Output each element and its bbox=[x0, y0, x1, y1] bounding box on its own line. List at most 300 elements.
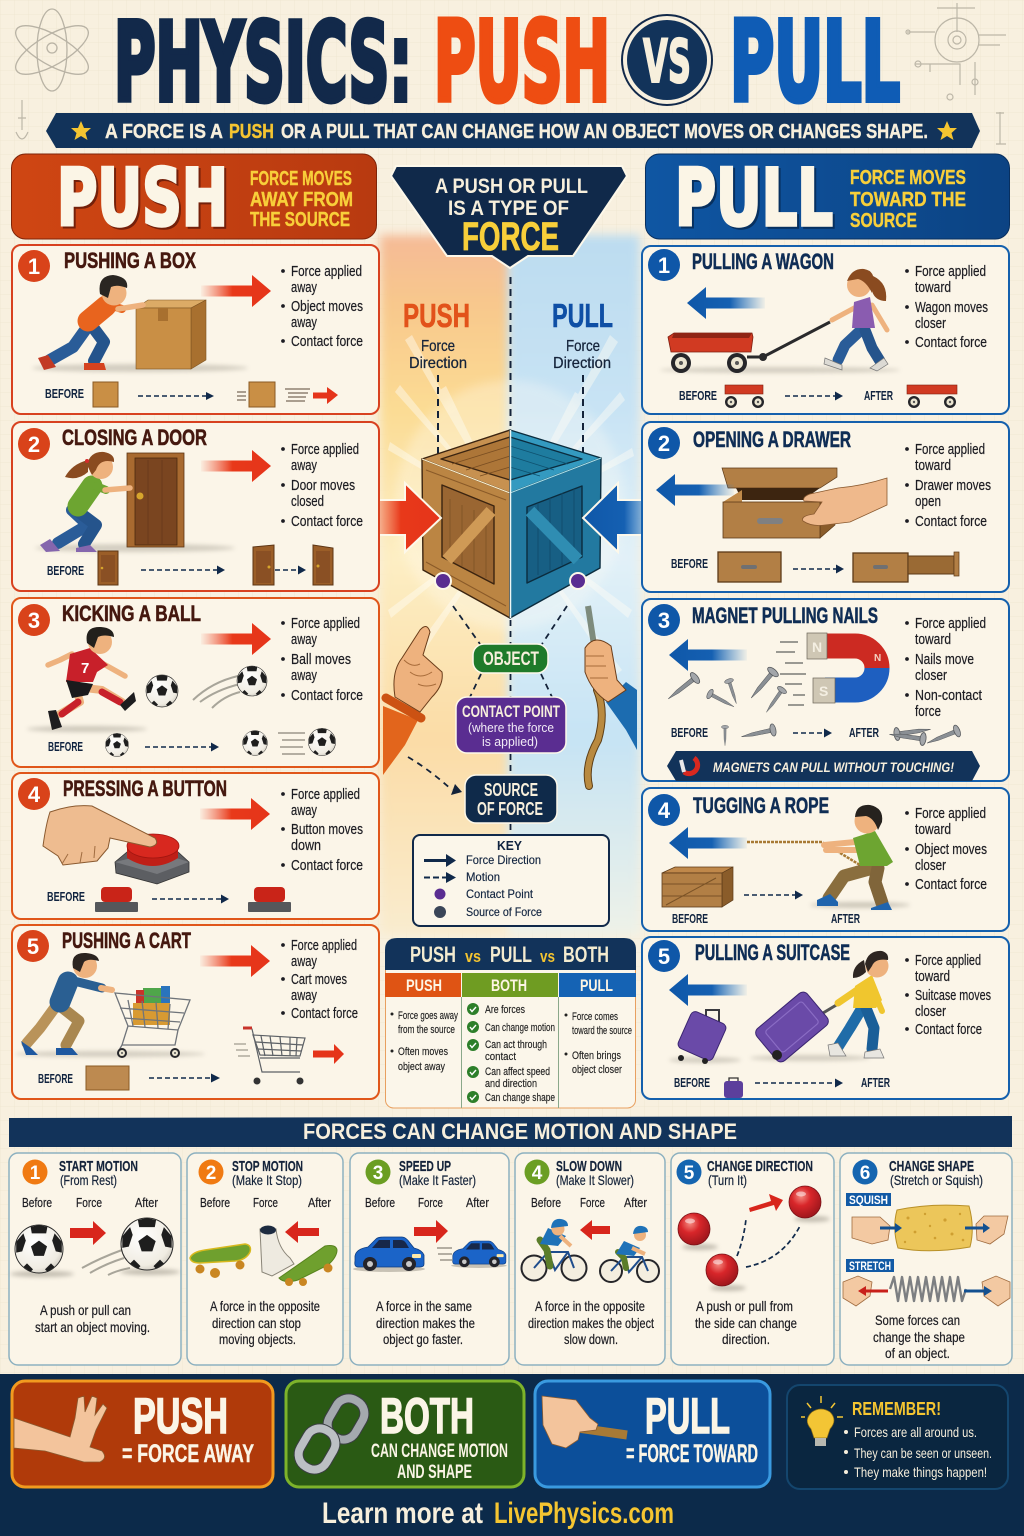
caption: direction makes the bbox=[376, 1315, 475, 1331]
sub-heading: away from source bbox=[250, 168, 353, 231]
before and after strip bbox=[674, 1075, 890, 1098]
bullets: Contact force bbox=[915, 334, 987, 351]
bullets: away bbox=[291, 314, 317, 331]
panel: stop motion bbox=[187, 1153, 343, 1365]
bullets: away bbox=[291, 953, 317, 970]
bullets bbox=[905, 615, 986, 720]
reminder list: Forces are all around us. bbox=[854, 1424, 977, 1440]
labels: before force after: Before bbox=[365, 1195, 395, 1210]
bullets: away bbox=[291, 987, 317, 1004]
heading: PULL: PULL bbox=[675, 154, 833, 244]
bullets: force bbox=[915, 703, 941, 720]
column: PULL: toward the source bbox=[572, 1025, 632, 1037]
arrow: force bbox=[580, 1220, 610, 1240]
badge 4: 4 bbox=[532, 1163, 543, 1184]
heading: (From Rest) bbox=[60, 1172, 117, 1188]
illustration: wagon bbox=[660, 322, 900, 373]
arrow: pull into crate bbox=[583, 483, 658, 552]
caption: force away: = FORCE AWAY bbox=[122, 1440, 254, 1468]
bullets: closer bbox=[915, 1003, 946, 1020]
sub-heading: toward source: FORCE MOVES bbox=[850, 167, 966, 189]
caption: A force in the opposite bbox=[535, 1298, 645, 1314]
footer band bbox=[0, 1374, 1024, 1536]
bullets: Contact force bbox=[915, 1021, 982, 1038]
badge 2 bbox=[648, 427, 680, 459]
word: PUSH: PUSH bbox=[133, 1388, 228, 1444]
bullets: Force applied bbox=[915, 805, 986, 822]
key: contact point: Contact Point bbox=[466, 887, 534, 901]
arrow: force bbox=[285, 1221, 319, 1243]
heading: (Turn It) bbox=[708, 1172, 747, 1188]
bullets: down bbox=[291, 837, 321, 854]
labels: before force after bbox=[22, 1195, 159, 1210]
heading: (Make It Stop) bbox=[232, 1172, 302, 1188]
bullets: closed bbox=[291, 493, 324, 510]
crate teal side bbox=[510, 430, 601, 618]
caption: of an object. bbox=[885, 1345, 950, 1361]
heading: PUSHING A CART bbox=[62, 928, 191, 953]
panel: change direction bbox=[671, 1153, 834, 1365]
illustration: girl closing door bbox=[35, 452, 235, 552]
column: BOTH: Can change motion bbox=[485, 1022, 555, 1034]
column: PUSH: object away bbox=[398, 1061, 445, 1073]
heading bbox=[707, 1158, 813, 1188]
illustration: kid kicking ball: 7 bbox=[81, 660, 89, 677]
caption: A force in the opposite bbox=[210, 1298, 320, 1314]
reminder list: They make things happen! bbox=[854, 1464, 987, 1480]
word: PULL: PULL bbox=[645, 1388, 730, 1444]
panel: speed up bbox=[350, 1153, 509, 1365]
legend: key bbox=[413, 835, 609, 926]
illustration: pressing hand bbox=[43, 806, 157, 865]
arrow: side force bbox=[749, 1194, 783, 1212]
label: CONTACT POINT: is applied) bbox=[482, 734, 538, 749]
label: push force direction: Force bbox=[421, 338, 455, 355]
label: SOURCE OF FORCE: SOURCE bbox=[484, 780, 538, 800]
illustration: squished sponge with hands bbox=[852, 1205, 1008, 1251]
heading: STOP MOTION bbox=[232, 1158, 303, 1175]
panel: change shape bbox=[840, 1153, 1012, 1365]
arrow: force bbox=[70, 1221, 106, 1245]
bullets bbox=[905, 441, 991, 530]
illustration: kid pushing box bbox=[32, 275, 248, 372]
bullets: Force applied bbox=[915, 952, 981, 969]
column: BOTH: Can change shape bbox=[485, 1092, 555, 1104]
bullets: Contact force bbox=[915, 513, 987, 530]
heading: PULLING A SUITCASE bbox=[695, 940, 850, 965]
before and after strip bbox=[47, 545, 333, 585]
arrow: force bbox=[200, 798, 270, 830]
column: PUSH: Often moves bbox=[398, 1046, 448, 1058]
before and after strip bbox=[38, 1028, 344, 1090]
label: OBJECT bbox=[473, 644, 548, 673]
badge 2: 2 bbox=[28, 432, 40, 457]
caption: moving objects. bbox=[219, 1331, 296, 1347]
table title: PUSH bbox=[410, 942, 456, 967]
bullets: Contact force bbox=[291, 333, 363, 350]
caption: direction makes the object bbox=[528, 1315, 654, 1331]
key: force direction: Force Direction bbox=[466, 853, 541, 867]
column: PULL bbox=[559, 973, 636, 1076]
panel: pull summary bbox=[535, 1381, 770, 1487]
illustration: girl pulling wagon bbox=[824, 269, 888, 371]
badge 5 bbox=[648, 940, 680, 972]
before and after strip bbox=[671, 723, 962, 749]
caption bbox=[528, 1298, 654, 1347]
bullets: Force applied bbox=[291, 786, 360, 803]
badge 1: 1 bbox=[30, 1163, 41, 1184]
heading: SLOW DOWN bbox=[556, 1158, 622, 1175]
bullets: Contact force bbox=[291, 513, 363, 530]
badge 2 bbox=[18, 428, 50, 460]
table title bbox=[385, 938, 636, 970]
bullets: Object moves bbox=[915, 841, 987, 858]
labels: before force after: After bbox=[135, 1195, 159, 1210]
section banner: forces can change motion and shape bbox=[9, 1116, 1012, 1147]
heading: PUSHING A BOX bbox=[64, 248, 196, 273]
sub-heading: toward source: TOWARD THE bbox=[850, 189, 966, 211]
illustration: suitcase at rest bbox=[669, 1010, 741, 1064]
illustration: car after bbox=[437, 1241, 507, 1268]
panel: slow down bbox=[515, 1153, 665, 1365]
column: BOTH: Can act through bbox=[485, 1039, 547, 1051]
column: BOTH: and direction bbox=[485, 1078, 537, 1090]
callout: a type of force bbox=[391, 166, 627, 268]
arrow: force bbox=[669, 974, 747, 1006]
column: PULL: PULL bbox=[580, 976, 613, 995]
table title: PULL bbox=[490, 942, 532, 967]
icon: light bulb bbox=[801, 1396, 843, 1446]
label: pull force direction: Direction bbox=[553, 355, 611, 372]
label: SOURCE OF FORCE bbox=[465, 775, 557, 823]
badge 5 bbox=[17, 930, 49, 962]
illustration: speed lines bbox=[776, 642, 806, 705]
panel: remember bbox=[787, 1385, 1008, 1489]
heading: START MOTION bbox=[59, 1158, 138, 1175]
badge 3 bbox=[648, 604, 680, 636]
bullets: Contact force bbox=[291, 1005, 358, 1022]
word: BOTH: BOTH bbox=[380, 1388, 474, 1444]
badge 4: 4 bbox=[28, 782, 41, 807]
illustration: red balls bbox=[678, 1186, 830, 1291]
bullets: Force applied bbox=[915, 441, 985, 458]
labels: before force after bbox=[200, 1195, 332, 1210]
contact points on crate bbox=[434, 572, 587, 590]
before and after strip bbox=[45, 382, 338, 407]
caption: direction can stop bbox=[212, 1315, 301, 1331]
definition ribbon bbox=[46, 113, 980, 148]
illustration: open drawer bbox=[722, 468, 837, 538]
panel: push summary bbox=[12, 1381, 273, 1487]
arrow: push into crate bbox=[368, 483, 441, 552]
reminder list bbox=[844, 1424, 992, 1480]
card: pulling a wagon bbox=[642, 246, 1009, 414]
heading: OPENING A DRAWER bbox=[693, 427, 851, 452]
illustration: horseshoe magnet: N bbox=[874, 653, 881, 664]
card: closing a door bbox=[12, 422, 379, 591]
badge 5 bbox=[676, 1160, 702, 1184]
illustration: girl pulling suitcase bbox=[828, 951, 888, 1058]
arrow: force bbox=[687, 287, 765, 319]
decoration: lab apparatus sketch bbox=[16, 3, 1006, 144]
heading bbox=[59, 1158, 138, 1188]
illustration: pointing hand with orange sleeve bbox=[383, 626, 442, 775]
key: motion: Motion bbox=[466, 870, 500, 884]
bullets bbox=[281, 615, 363, 704]
labels: before force after: After bbox=[624, 1195, 648, 1210]
caption: start an object moving. bbox=[35, 1319, 150, 1335]
labels: before force after: Force bbox=[580, 1195, 605, 1210]
bullets: Contact force bbox=[291, 857, 363, 874]
central diagram backdrop bbox=[380, 235, 640, 935]
illustration: cyclist after bbox=[600, 1226, 659, 1282]
illustration: kid kicking ball bbox=[27, 627, 147, 732]
labels: before force after bbox=[365, 1195, 490, 1210]
callout: a type of force: IS A TYPE OF bbox=[448, 197, 569, 220]
badge 1: 1 bbox=[658, 253, 670, 278]
table title: vs bbox=[465, 947, 481, 966]
column: BOTH: Can affect speed bbox=[485, 1066, 550, 1078]
label: push force direction: Direction bbox=[409, 355, 467, 372]
arrow: force bbox=[669, 827, 747, 859]
illustration: moving soccer ball bbox=[193, 666, 267, 708]
before and after strip bbox=[48, 728, 336, 757]
illustration: hand pulling rope bbox=[542, 1396, 627, 1448]
labels: before force after: After bbox=[308, 1195, 332, 1210]
arrow: force bbox=[201, 450, 271, 482]
before and after strip bbox=[47, 887, 291, 912]
label: CONTACT POINT: CONTACT POINT bbox=[462, 702, 560, 721]
footer link line: LivePhysics.com bbox=[494, 1497, 674, 1530]
column: PULL: Often brings bbox=[572, 1050, 621, 1062]
title word: PUSH: PUSH bbox=[434, 0, 610, 126]
bullets: Force applied bbox=[291, 263, 362, 280]
bullets: Force applied bbox=[291, 937, 357, 954]
title bbox=[114, 0, 900, 126]
badge 3 bbox=[366, 1160, 390, 1184]
illustration: stretched spring with hands bbox=[843, 1276, 1010, 1306]
illustration: crate bbox=[662, 867, 733, 907]
caption bbox=[873, 1312, 965, 1361]
caption: can change motion and shape: AND SHAPE bbox=[397, 1462, 472, 1483]
label: CONTACT POINT: (where the force bbox=[468, 720, 554, 735]
column: BOTH bbox=[462, 973, 558, 1108]
card: magnet pulling nails bbox=[642, 599, 1009, 781]
heading: TUGGING A ROPE bbox=[693, 793, 829, 818]
labels: before force after: Before bbox=[200, 1195, 230, 1210]
bullets: Force applied bbox=[915, 615, 986, 632]
tag: squish: SQUISH bbox=[849, 1193, 888, 1207]
caption bbox=[376, 1298, 475, 1347]
bullets: Force applied bbox=[915, 263, 986, 280]
before and after strip: BEFORE bbox=[47, 563, 84, 578]
arrow head: source of force bbox=[451, 784, 462, 795]
card: pressing a button bbox=[12, 773, 379, 919]
heading: CHANGE DIRECTION bbox=[707, 1158, 813, 1175]
bullets: Door moves bbox=[291, 477, 355, 494]
panel: PULL header bbox=[646, 154, 1010, 244]
caption: object go faster. bbox=[383, 1331, 463, 1347]
decoration: atom sketch bbox=[9, 9, 95, 91]
label: SOURCE OF FORCE: OF FORCE bbox=[477, 799, 543, 819]
bullets: toward bbox=[915, 279, 951, 296]
label: pull force direction: Force bbox=[566, 338, 600, 355]
panel: PUSH header bbox=[12, 154, 376, 244]
bullets bbox=[905, 805, 987, 893]
heading bbox=[399, 1158, 476, 1188]
card: pushing a box bbox=[12, 245, 379, 414]
heading: (Stretch or Squish) bbox=[890, 1172, 983, 1188]
before and after strip: AFTER bbox=[849, 725, 879, 740]
heading: SPEED UP bbox=[399, 1158, 451, 1175]
before and after strip: AFTER bbox=[831, 911, 860, 926]
bullets bbox=[905, 952, 991, 1038]
labels: before force after: Force bbox=[418, 1195, 443, 1210]
illustration: horseshoe magnet: S bbox=[819, 683, 828, 699]
bullets: closer bbox=[915, 315, 946, 332]
table title: vs bbox=[540, 947, 555, 966]
label: push force direction bbox=[403, 297, 470, 372]
heading: MAGNET PULLING NAILS bbox=[692, 603, 878, 628]
illustration: kid tugging rope bbox=[747, 805, 910, 910]
badge 1 bbox=[22, 1160, 48, 1184]
heading bbox=[232, 1158, 303, 1188]
before and after strip bbox=[679, 385, 957, 408]
crate wood side bbox=[422, 430, 510, 618]
before and after strip: BEFORE bbox=[674, 1075, 710, 1090]
heading: PRESSING A BUTTON bbox=[63, 776, 227, 801]
illustration: suitcase in motion bbox=[750, 990, 870, 1064]
before and after strip: BEFORE bbox=[47, 889, 85, 904]
badge 4 bbox=[524, 1160, 550, 1184]
labels: before force after: After bbox=[466, 1195, 490, 1210]
label: pull force direction bbox=[552, 297, 613, 372]
badge 3: 3 bbox=[28, 608, 40, 633]
bullets: Force applied bbox=[291, 615, 360, 632]
key: contact point bbox=[434, 887, 534, 901]
before and after strip: BEFORE bbox=[671, 725, 708, 740]
bullets: Non-contact bbox=[915, 687, 983, 704]
badge 2 bbox=[198, 1160, 224, 1184]
arrow: force bbox=[201, 275, 271, 307]
arrow: force bbox=[414, 1220, 448, 1243]
heading: CLOSING A DOOR bbox=[62, 425, 207, 450]
caption: Some forces can bbox=[875, 1312, 960, 1328]
bullets: Force applied bbox=[291, 441, 359, 458]
badge 6: 6 bbox=[860, 1163, 870, 1184]
tag: stretch: STRETCH bbox=[849, 1259, 891, 1273]
column: PUSH: Force goes away bbox=[398, 1010, 458, 1022]
bullets: Drawer moves bbox=[915, 477, 991, 494]
callout: magnets can pull without touching bbox=[667, 751, 980, 781]
illustration: nails bbox=[664, 666, 788, 715]
caption: A push or pull can bbox=[40, 1302, 131, 1318]
callout: a type of force: A PUSH OR PULL bbox=[435, 175, 588, 198]
bullets: toward bbox=[915, 457, 951, 474]
arrow: force bbox=[656, 474, 734, 506]
icon: star bbox=[71, 121, 91, 140]
bullets: Ball moves bbox=[291, 651, 351, 668]
badge 3 bbox=[18, 604, 50, 636]
column: BOTH: Are forces bbox=[485, 1004, 525, 1016]
badge 4 bbox=[648, 794, 680, 826]
footer link line: Learn more at bbox=[322, 1497, 483, 1530]
illustration: soccer ball bbox=[146, 675, 178, 707]
labels: before force after: Force bbox=[253, 1195, 278, 1210]
bullets bbox=[281, 441, 363, 530]
badge 3: 3 bbox=[658, 608, 670, 633]
key: motion bbox=[424, 870, 500, 884]
illustration: skateboard stopped bbox=[279, 1246, 337, 1286]
heading bbox=[889, 1158, 983, 1188]
illustration: button bbox=[115, 834, 189, 884]
labels: before force after bbox=[531, 1195, 648, 1210]
key: force direction bbox=[424, 853, 541, 867]
arrow: force bbox=[200, 945, 270, 977]
caption: slow down. bbox=[564, 1331, 618, 1347]
label: OBJECT: OBJECT bbox=[483, 649, 539, 670]
illustration: skateboard rolling bbox=[190, 1244, 250, 1278]
bullets: toward bbox=[915, 631, 951, 648]
VS badge bbox=[622, 15, 712, 105]
before and after strip: BEFORE bbox=[679, 388, 717, 403]
bullets: Suitcase moves bbox=[915, 987, 991, 1004]
column: PUSH bbox=[385, 973, 461, 1073]
badge 3: 3 bbox=[373, 1163, 383, 1184]
caption bbox=[210, 1298, 320, 1347]
bullets bbox=[905, 263, 988, 351]
illustration: horseshoe magnet bbox=[807, 633, 881, 703]
heading: remember: REMEMBER! bbox=[852, 1399, 941, 1419]
icon: star bbox=[937, 121, 957, 140]
bullets: away bbox=[291, 802, 317, 819]
badge 5: 5 bbox=[27, 934, 39, 959]
before and after strip: AFTER bbox=[861, 1075, 890, 1090]
badge 1 bbox=[18, 250, 50, 282]
card: kicking a ball bbox=[12, 598, 379, 767]
panel: start motion bbox=[9, 1153, 181, 1365]
callout: a type of force: FORCE bbox=[462, 215, 559, 259]
column: BOTH: BOTH bbox=[491, 976, 527, 995]
section banner: forces can change motion and shape: FORCES CAN CHANGE MOTION AND SHAPE bbox=[303, 1119, 737, 1144]
ribbon text: PUSH bbox=[229, 121, 274, 143]
arrow: force bbox=[201, 623, 271, 655]
bullets: away bbox=[291, 457, 317, 474]
table title: BOTH bbox=[563, 942, 609, 967]
bullets: toward bbox=[915, 968, 950, 985]
before and after strip: BEFORE bbox=[672, 911, 708, 926]
badge 6 bbox=[852, 1160, 878, 1184]
badge 4: 4 bbox=[658, 798, 671, 823]
before and after strip: BEFORE bbox=[48, 739, 83, 754]
VS badge: VS bbox=[643, 27, 691, 97]
badge 2: 2 bbox=[206, 1163, 216, 1184]
connector lines to labels bbox=[408, 606, 567, 835]
caption: direction. bbox=[722, 1331, 770, 1347]
illustration: hand gripping rope bbox=[585, 606, 637, 786]
caption: A push or pull from bbox=[696, 1298, 793, 1314]
footer link line bbox=[322, 1497, 674, 1530]
heading: KICKING A BALL bbox=[62, 601, 201, 626]
caption bbox=[35, 1302, 150, 1335]
key: source of force: Source of Force bbox=[466, 905, 542, 919]
sub-heading: toward source: SOURCE bbox=[850, 210, 917, 232]
sub-heading: away from source: FORCE MOVES bbox=[250, 168, 352, 190]
heading: PULLING A WAGON bbox=[692, 249, 834, 274]
badge 2: 2 bbox=[658, 431, 670, 456]
bullets: away bbox=[291, 279, 317, 296]
bullets: Cart moves bbox=[291, 971, 347, 988]
